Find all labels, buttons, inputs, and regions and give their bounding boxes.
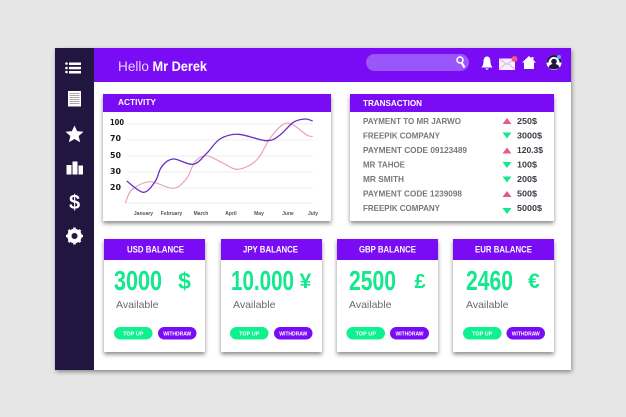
top up button: TOP UP — [472, 332, 493, 338]
transaction names — [363, 116, 467, 213]
withdraw button: WITHDRAW — [163, 331, 192, 337]
x axis labels: January — [134, 211, 153, 217]
transaction amounts: 200$ — [517, 175, 538, 184]
panel: JPY balance — [221, 239, 322, 352]
transaction amounts: 250$ — [517, 117, 538, 126]
panel: activity — [103, 94, 331, 221]
card heading: EUR BALANCE — [475, 244, 532, 254]
withdraw button: WITHDRAW — [512, 331, 540, 337]
transaction names: FREEPIK COMPANY — [363, 130, 440, 140]
transaction amounts: 5000$ — [517, 204, 543, 213]
icon: document — [68, 91, 81, 106]
amount: 2460 — [466, 265, 513, 296]
withdraw button: WITHDRAW — [279, 331, 308, 337]
x axis labels — [134, 211, 318, 217]
withdraw button: WITHDRAW — [395, 331, 424, 337]
y axis labels — [110, 118, 124, 192]
panel: transaction — [350, 94, 554, 221]
transaction names: PAYMENT TO MR JARWO — [363, 116, 461, 126]
panel: EUR balance — [453, 239, 554, 352]
icon: menu list — [65, 62, 81, 74]
icon: bell — [482, 56, 492, 70]
sidebar — [55, 48, 94, 370]
icon: mail — [499, 56, 518, 70]
top up button: TOP UP — [123, 332, 144, 338]
x axis labels: May — [254, 211, 264, 217]
transaction amounts: 120.3$ — [517, 146, 544, 155]
transaction amounts: 100$ — [517, 160, 538, 170]
available label: Available — [233, 299, 276, 311]
transaction names: PAYMENT CODE 09123489 — [363, 145, 467, 155]
transaction amounts: 500$ — [517, 190, 538, 198]
amount: 2500 — [349, 265, 396, 296]
line chart — [110, 118, 318, 217]
y axis labels: 70 — [110, 134, 121, 143]
transaction names: PAYMENT CODE 1239098 — [363, 188, 462, 198]
amount: 10.000 — [231, 265, 294, 296]
top up button: TOP UP — [239, 332, 260, 338]
card heading: USD BALANCE — [127, 244, 184, 254]
y axis labels: 50 — [110, 151, 121, 160]
icon: bar chart — [66, 162, 83, 174]
panel: USD balance — [104, 239, 205, 352]
icon: avatar — [546, 55, 562, 70]
available label: Available — [466, 299, 509, 311]
currency symbol: £ — [414, 271, 426, 293]
greeting — [118, 58, 207, 74]
greeting: Mr Derek — [152, 58, 207, 74]
x axis labels: February — [161, 211, 182, 217]
y axis labels: 30 — [110, 167, 121, 176]
icon: home — [522, 56, 536, 69]
transaction names: FREEPIK COMPANY — [363, 203, 440, 213]
y axis labels: 100 — [110, 118, 124, 127]
activity heading — [103, 94, 331, 112]
icon: dollar: $ — [69, 192, 80, 214]
available label: Available — [349, 299, 392, 311]
available label: Available — [116, 299, 159, 311]
transaction heading: TRANSACTION — [363, 98, 422, 108]
transaction amounts: 3000$ — [517, 132, 543, 140]
amount: 3000 — [114, 265, 162, 296]
x axis labels: June — [282, 211, 294, 217]
dashboard frame — [55, 48, 571, 370]
currency symbol: ¥ — [300, 270, 312, 293]
currency symbol: € — [528, 270, 540, 293]
x axis labels: April — [225, 211, 237, 217]
search box — [366, 54, 469, 71]
currency symbol: $ — [178, 268, 191, 294]
activity heading: ACTIVITY — [118, 97, 156, 107]
top up button: TOP UP — [356, 332, 376, 338]
purple series — [127, 119, 313, 192]
transaction amounts — [517, 117, 544, 213]
transaction names: MR SMITH — [363, 174, 404, 184]
icon: gear — [66, 228, 83, 244]
transaction heading — [350, 94, 554, 112]
x axis labels: July — [308, 211, 318, 217]
x axis labels: March — [194, 211, 208, 217]
trend arrows — [502, 118, 512, 214]
icon: star — [66, 126, 84, 142]
card heading: GBP BALANCE — [359, 244, 416, 254]
greeting: Hello — [118, 58, 149, 74]
card heading: JPY BALANCE — [243, 244, 298, 254]
transaction names: MR TAHOE — [363, 160, 405, 170]
panel: GBP balance — [337, 239, 438, 352]
pink series — [125, 123, 313, 203]
header bar — [94, 48, 571, 82]
y axis labels: 20 — [110, 183, 121, 192]
